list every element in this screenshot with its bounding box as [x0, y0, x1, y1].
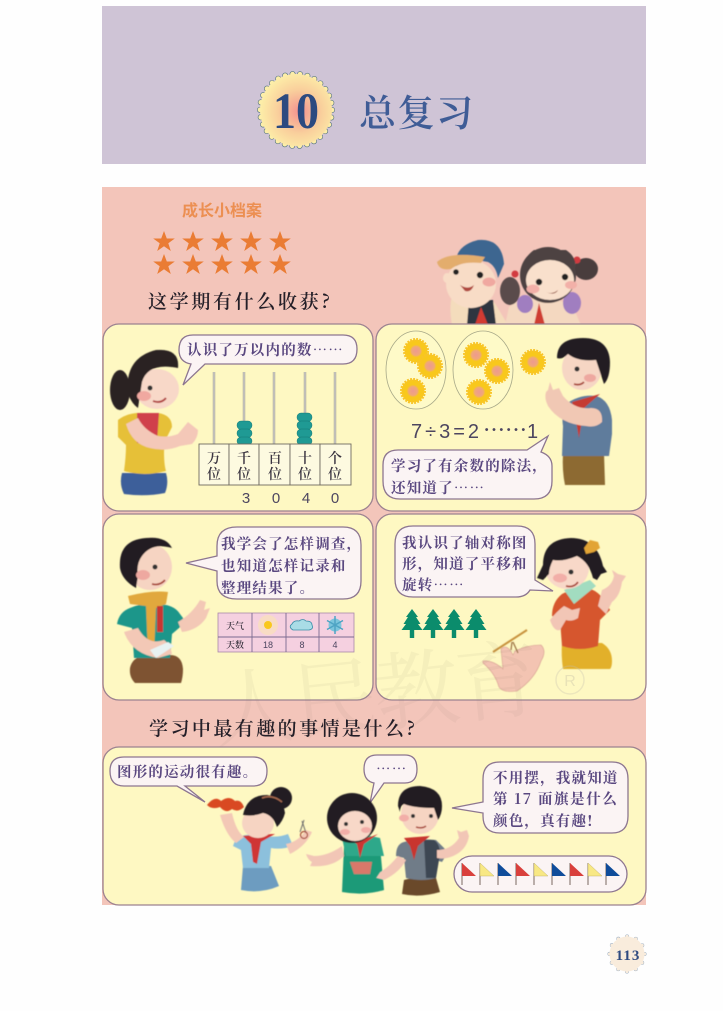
- sunflower groups: [386, 331, 544, 409]
- abacus place value chart: [199, 372, 351, 507]
- panel 1: numbers within ten thousand: [103, 324, 373, 511]
- flag pattern bubble: [454, 856, 627, 892]
- speech bubble: [395, 526, 553, 597]
- abacus place value chart: 个: [328, 448, 342, 468]
- panel 5: fun in learning: 不用摆，我就知道: [493, 767, 619, 788]
- speech bubble: [383, 436, 552, 499]
- abacus place value chart: 0: [331, 490, 339, 507]
- panel 5: fun in learning: 图形的运动很有趣。: [117, 761, 258, 782]
- registered mark: [556, 666, 584, 694]
- page number badge: [610, 936, 644, 972]
- abacus place value chart: 万: [207, 448, 221, 468]
- division equation: ……: [483, 413, 527, 445]
- girl illustration: [110, 350, 198, 495]
- header band: [102, 6, 646, 164]
- panel 4: symmetry and transformation: 旋转……: [402, 574, 465, 595]
- chapter number seal: [260, 74, 332, 146]
- speech bubble: [186, 527, 361, 599]
- speech bubble left: [110, 757, 267, 802]
- beads thousands: [237, 421, 252, 445]
- weather data table: 天数: [226, 638, 244, 651]
- abacus place value chart: 0: [272, 490, 280, 507]
- icon: cloud: [290, 620, 313, 630]
- panel 4: symmetry and transformation: 形，知道了平移和: [402, 553, 528, 574]
- girl illustration: [537, 538, 626, 669]
- panel 2: division with remainder: 学习了有余数的除法，: [391, 455, 548, 476]
- division equation: 1: [527, 421, 538, 443]
- abacus place value chart: 位: [207, 464, 221, 484]
- panel 1: numbers within ten thousand: 认识了万以内的数……: [187, 339, 344, 360]
- hands with paper propeller: [483, 630, 544, 692]
- middle girl: [306, 793, 384, 894]
- icon: snowflake: [327, 616, 343, 634]
- stars rating: [153, 231, 291, 274]
- icon: sun: [258, 615, 278, 635]
- question heading 2: 学习中最有趣的事情是什么?: [149, 714, 415, 741]
- boy illustration: [545, 338, 612, 485]
- abacus place value chart: 3: [242, 490, 250, 507]
- two children peeking: [437, 240, 598, 325]
- weather data table: 8: [299, 640, 305, 650]
- panel 5: fun in learning: 颜色，真有趣!: [493, 810, 594, 831]
- speech bubble middle: [364, 755, 417, 803]
- division equation: 7÷3=2: [411, 421, 482, 443]
- weather data table: 天气: [226, 619, 244, 632]
- panel 3: survey and data: 也知道怎样记录和: [221, 555, 347, 576]
- panel 3: survey and data: [103, 514, 373, 700]
- abacus place value chart: 位: [237, 464, 251, 484]
- speech bubble: [179, 335, 357, 385]
- abacus place value chart: 位: [268, 464, 282, 484]
- boy illustration: [117, 538, 210, 683]
- panel 2: division with remainder: 还知道了……: [391, 477, 485, 498]
- abacus place value chart: 位: [298, 464, 312, 484]
- page number badge: 113: [616, 948, 640, 964]
- division equation: [411, 413, 538, 445]
- panel 5: fun in learning: 第 17 面旗是什么: [493, 788, 618, 809]
- panel 5: fun in learning: ……: [376, 758, 407, 779]
- abacus place value chart: 百: [268, 448, 282, 468]
- watermark: 人民教育: [205, 611, 546, 767]
- weather data table: 4: [332, 640, 338, 650]
- speech bubble right: [452, 762, 628, 833]
- growth record heading: 成长小档案: [182, 197, 262, 221]
- beads tens: [297, 413, 312, 445]
- panel 4: symmetry and transformation: 我认识了轴对称图: [402, 532, 528, 553]
- pink page panel: [102, 187, 646, 905]
- panel 3: survey and data: 我学会了怎样调查，: [221, 533, 362, 554]
- weather data table: 18: [263, 640, 273, 650]
- panel 4: symmetry and transformation: [376, 514, 646, 700]
- abacus place value chart: 4: [302, 490, 310, 507]
- chapter title: 总复习: [359, 83, 473, 137]
- panel 3: survey and data: 整理结果了。: [221, 577, 315, 598]
- abacus place value chart: 位: [328, 464, 342, 484]
- panel 5: fun in learning: [103, 747, 646, 905]
- abacus place value chart: 十: [298, 448, 312, 468]
- weather data table: [218, 613, 354, 652]
- abacus place value chart: 千: [237, 448, 251, 468]
- registered mark: R: [564, 673, 576, 690]
- pine trees: [402, 609, 486, 638]
- question heading 1: 这学期有什么收获?: [148, 287, 330, 314]
- chapter number seal: 10: [273, 84, 319, 140]
- panel 2: division with remainder: [376, 324, 646, 511]
- left girl with paper cut: [207, 787, 312, 891]
- right boy: [376, 786, 469, 896]
